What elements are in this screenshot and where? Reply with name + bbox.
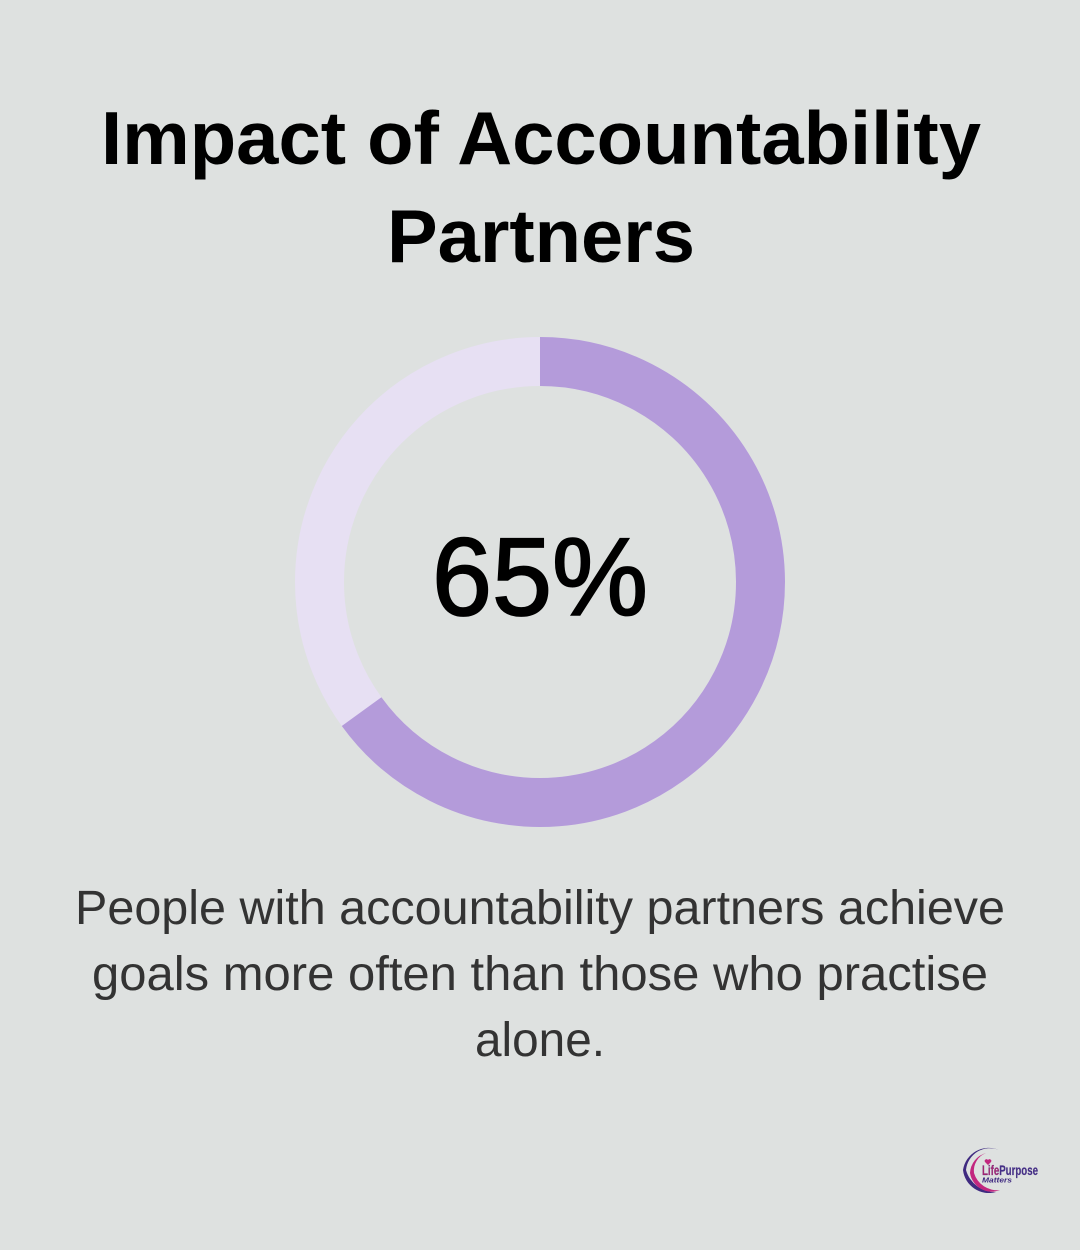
- logo arcs: [963, 1148, 999, 1193]
- description text: alone.: [475, 1014, 605, 1067]
- description text: [75, 882, 1005, 1067]
- logo wordmark: LifePurpose: [982, 1162, 1038, 1178]
- description text: goals more often than those who practise: [92, 948, 988, 1001]
- percentage value: 65%: [432, 516, 648, 639]
- donut track: [320, 362, 760, 802]
- title: Partners: [387, 194, 695, 278]
- description text: People with accountability partners achieve: [75, 882, 1005, 935]
- title: Impact of Accountability: [101, 96, 981, 180]
- title: [101, 96, 981, 278]
- logo heart: [985, 1159, 991, 1165]
- donut value arc: [362, 362, 760, 803]
- donut chart: 65%: [320, 362, 760, 803]
- logo: Life Purpose Matters: Matters: [982, 1176, 1012, 1184]
- logo: Life Purpose Matters: [963, 1148, 1038, 1193]
